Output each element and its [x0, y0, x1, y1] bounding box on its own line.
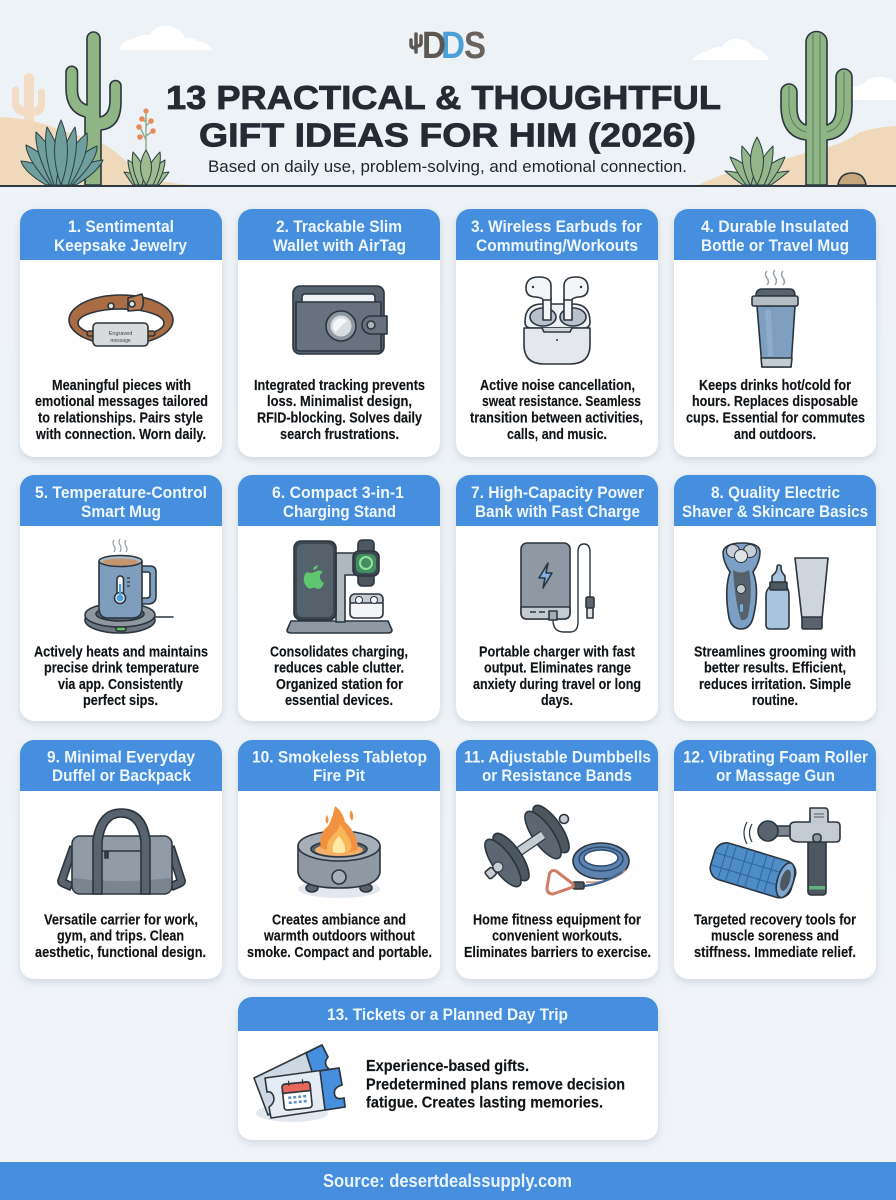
heading 12: 12. Vibrating Foam Roller: [683, 748, 868, 766]
heading 10: Fire Pit: [313, 766, 365, 785]
description 9: gym, and trips. Clean: [57, 929, 184, 945]
description 2: Integrated tracking prevents: [254, 378, 425, 394]
heading 3: Commuting/Workouts: [476, 236, 638, 255]
right saguaro cactus: [781, 32, 852, 185]
heading 10: [238, 740, 440, 791]
description 11: convenient workouts.: [492, 929, 622, 945]
description 12: stiffness. Immediate relief.: [694, 945, 856, 961]
icon: 3-in-1 charging stand: [287, 540, 392, 633]
description 5: via app. Consistently: [58, 677, 183, 693]
description 9: [35, 912, 206, 961]
description 12: Targeted recovery tools for: [694, 912, 856, 928]
description 9: aesthetic, functional design.: [35, 945, 206, 961]
description 13: fatigue. Creates lasting memories.: [366, 1094, 603, 1112]
title: 13 PRACTICAL & THOUGHTFUL: [166, 80, 721, 117]
icon: heated mug on coaster: [85, 539, 173, 633]
heading 8: [674, 475, 876, 526]
description 5: precise drink temperature: [44, 661, 199, 677]
heading 8: 8. Quality Electric: [711, 483, 840, 502]
panel: card 4 travel mug: [674, 209, 876, 457]
subtitle: Based on daily use, problem-solving, and emotional connection.: [208, 158, 687, 176]
icon: foam roller: [707, 840, 799, 901]
icon: resistance band: [547, 843, 629, 894]
heading 1: Keepsake Jewelry: [54, 236, 187, 255]
description 4: hours. Replaces disposable: [692, 394, 858, 410]
description 3: transition between activities,: [470, 410, 643, 426]
description 6: essential devices.: [285, 693, 393, 709]
heading 6: 6. Compact 3-in-1: [272, 483, 404, 502]
heading 7: [456, 475, 658, 526]
description 10: smoke. Compact and portable.: [247, 945, 432, 961]
description 11: [464, 912, 651, 961]
icon: insulated travel mug: [752, 270, 798, 367]
heading 12: or Massage Gun: [716, 766, 835, 785]
heading 4: 4. Durable Insulated: [701, 217, 849, 236]
description 7: [473, 644, 641, 709]
heading 5: Smart Mug: [81, 502, 161, 521]
icon: duffel bag: [58, 809, 185, 894]
description 2: RFID-blocking. Solves daily: [257, 410, 422, 426]
panel: card 3 wireless earbuds: [456, 209, 658, 457]
heading 2: [238, 209, 440, 260]
faded background cactus: [12, 73, 45, 125]
sand dune left: [0, 117, 192, 185]
icon: leather bracelet: message: [110, 338, 131, 344]
heading 6: Charging Stand: [283, 502, 396, 521]
description 7: anxiety during travel or long: [473, 677, 641, 693]
description 8: Streamlines grooming with: [694, 644, 856, 660]
heading 8: Shaver & Skincare Basics: [682, 502, 868, 521]
desert scene header illustration: [0, 26, 896, 187]
heading 1: 1. Sentimental: [68, 217, 174, 236]
description 4: cups. Essential for commutes: [686, 410, 865, 426]
description 6: [270, 644, 408, 709]
description 10: warmth outdoors without: [263, 929, 415, 945]
panel: card 10 fire pit: [238, 740, 440, 979]
heading 9: Duffel or Backpack: [52, 766, 191, 785]
description 11: Eliminates barriers to exercise.: [464, 945, 651, 961]
description 2: loss. Minimalist design,: [267, 394, 412, 410]
description 13: Experience-based gifts.: [366, 1058, 529, 1075]
heading 4: [674, 209, 876, 260]
description 1: with connection. Worn daily.: [35, 427, 206, 443]
icon: leather bracelet: Engraved: [109, 331, 132, 337]
description 5: [34, 644, 208, 709]
description 6: reduces cable clutter.: [274, 661, 404, 677]
description 13: [366, 1058, 625, 1112]
heading 4: Bottle or Travel Mug: [701, 236, 849, 255]
description 8: better results. Efficient,: [704, 661, 846, 677]
panel: card 2 slim wallet: [238, 209, 440, 457]
icon: tabletop fire pit: [298, 806, 380, 898]
footer source bar: Source: desertdealssupply.com: [323, 1171, 572, 1191]
icon: massage gun: [744, 808, 840, 895]
description 7: Portable charger with fast: [479, 644, 635, 660]
description 10: [247, 912, 432, 961]
description 6: Consolidates charging,: [270, 644, 408, 660]
description 12: [694, 912, 856, 961]
title: GIFT IDEAS FOR HIM (2026): [199, 118, 696, 154]
description 2: search frustrations.: [280, 427, 399, 443]
icon: wallet with tracker: [293, 286, 387, 354]
heading 11: or Resistance Bands: [482, 766, 632, 785]
logo: S: [464, 25, 486, 67]
heading 7: 7. High-Capacity Power: [471, 483, 644, 502]
rock: [838, 173, 866, 185]
flowering stem: [136, 108, 156, 152]
heading 10: 10. Smokeless Tabletop: [252, 748, 427, 766]
icon: tickets with calendar: [254, 1045, 345, 1122]
large saguaro cactus left: [66, 32, 121, 185]
description 8: [694, 644, 856, 709]
description 3: sweat resistance. Seamless: [482, 394, 641, 410]
panel: card 12 foam roller and massage gun: [674, 740, 876, 979]
logo: D: [422, 25, 446, 67]
panel: card 6 charging stand: [238, 475, 440, 721]
title: [166, 80, 721, 154]
panel: card 1 keepsake jewelry: [20, 209, 222, 457]
panel: card 5 smart mug: [20, 475, 222, 721]
panel: card 11 dumbbells and bands: [456, 740, 658, 979]
icon: dumbbell: [479, 800, 575, 892]
heading 3: 3. Wireless Earbuds for: [471, 217, 642, 236]
heading 3: [456, 209, 658, 260]
description 3: calls, and music.: [507, 427, 607, 443]
heading 5: [20, 475, 222, 526]
description 8: reduces irritation. Simple: [699, 677, 851, 693]
heading 6: [238, 475, 440, 526]
description 2: [254, 378, 425, 443]
description 3: [470, 378, 643, 443]
description 5: Actively heats and maintains: [34, 644, 208, 660]
description 1: [35, 378, 208, 443]
description 13: Predetermined plans remove decision: [366, 1076, 625, 1094]
description 1: emotional messages tailored: [35, 394, 208, 410]
heading 7: Bank with Fast Charge: [475, 502, 640, 521]
icon: earbuds and case: [524, 277, 590, 364]
description 4: [686, 378, 865, 443]
heading 11: 11. Adjustable Dumbbells: [464, 748, 651, 766]
description 7: output. Eliminates range: [484, 661, 631, 677]
panel: card 8 shaver and skincare: [674, 475, 876, 721]
heading 1: [20, 209, 222, 260]
description 4: and outdoors.: [734, 427, 816, 443]
heading 13: [238, 997, 658, 1031]
cloud center right: [693, 39, 769, 60]
right agave: [725, 137, 789, 185]
heading 2: 2. Trackable Slim: [276, 217, 402, 236]
heading 2: Wallet with AirTag: [273, 236, 406, 255]
heading 9: 9. Minimal Everyday: [47, 748, 195, 766]
description 10: Creates ambiance and: [272, 912, 406, 928]
icon: electric shaver, serum bottle and tube: [723, 543, 828, 629]
panel: card 13 tickets or day trip: [238, 997, 658, 1140]
logo: [411, 25, 486, 67]
footer source bar: [0, 1162, 896, 1200]
description 4: Keeps drinks hot/cold for: [699, 378, 851, 394]
description 1: Meaningful pieces with: [52, 378, 191, 394]
ground line: [0, 185, 896, 187]
description 3: Active noise cancellation,: [480, 378, 635, 394]
description 5: perfect sips.: [83, 693, 158, 709]
description 11: Home fitness equipment for: [473, 912, 641, 928]
heading 13: 13. Tickets or a Planned Day Trip: [327, 1005, 568, 1024]
large agave: [21, 120, 103, 185]
panel: card 9 duffel bag: [20, 740, 222, 979]
panel: card 7 power bank: [456, 475, 658, 721]
icon: leather bracelet: [69, 294, 173, 346]
description 8: routine.: [752, 693, 798, 709]
cloud left: [120, 26, 212, 50]
description 1: to relationships. Pairs style: [38, 410, 203, 426]
cloud far right: [850, 77, 896, 100]
small agave: [124, 150, 169, 185]
description 12: muscle soreness and: [711, 929, 839, 945]
icon: power bank and cable: [521, 543, 594, 632]
sand dune right: [698, 126, 896, 185]
heading 11: [456, 740, 658, 791]
heading 9: [20, 740, 222, 791]
heading 5: 5. Temperature-Control: [35, 483, 207, 502]
description 9: Versatile carrier for work,: [44, 912, 198, 928]
logo: D: [441, 25, 465, 67]
heading 12: [674, 740, 876, 791]
description 6: Organized station for: [276, 677, 403, 693]
description 7: days.: [541, 693, 573, 709]
